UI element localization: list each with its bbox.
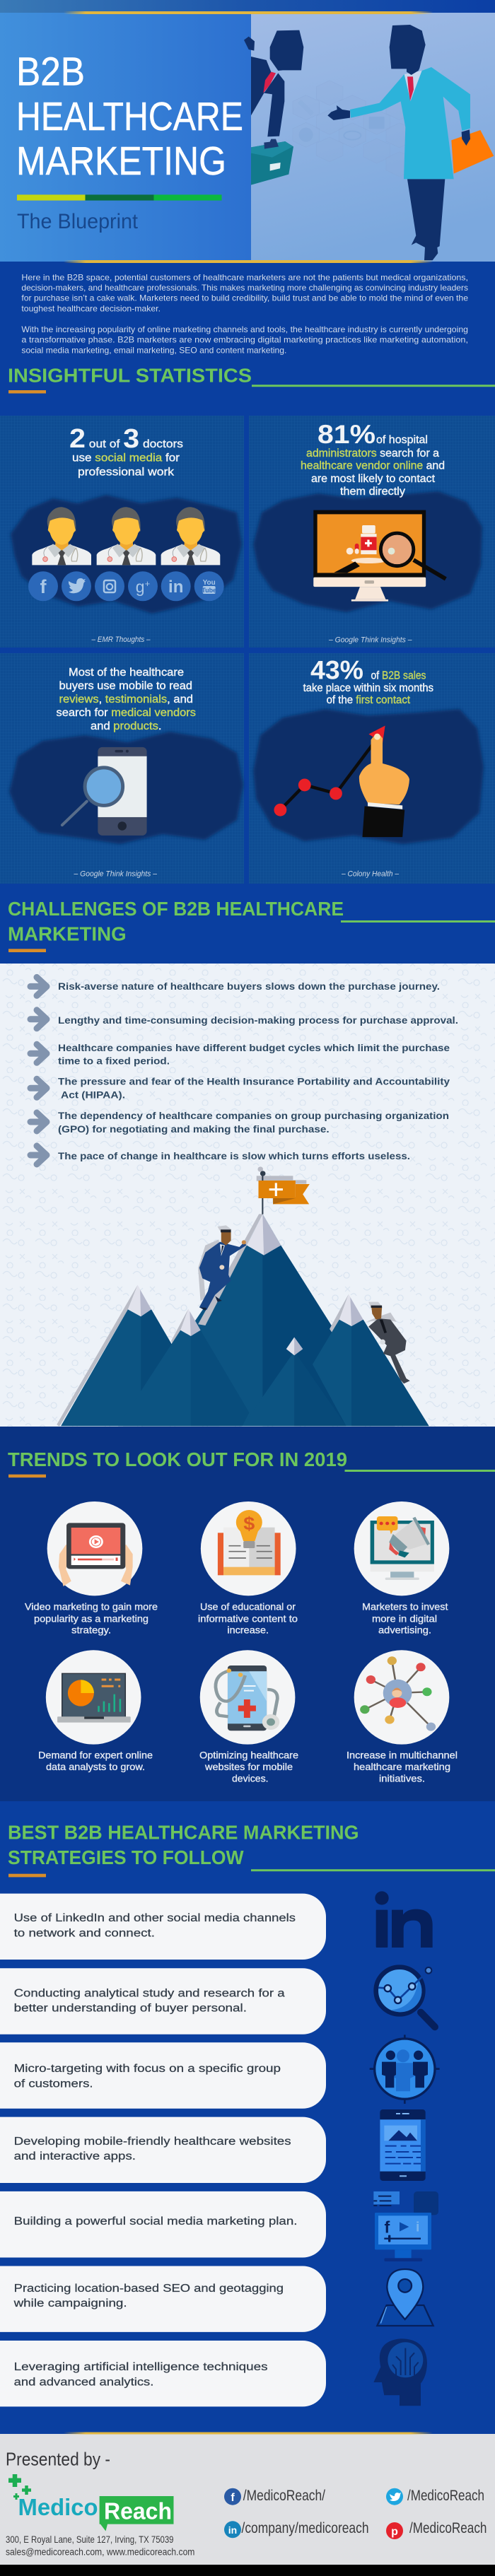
- caption: Demand for expert online: [38, 1749, 153, 1760]
- social: pinterest: p: [391, 2526, 398, 2538]
- strategy card: analytical research: [0, 1968, 326, 2035]
- icon: map pin: [377, 2269, 433, 2326]
- panel: sales timing stat: [249, 653, 495, 884]
- stat text: take place within six months: [303, 682, 433, 694]
- icons: three doctors: [32, 507, 220, 565]
- icon: book with bulb: [201, 1501, 296, 1596]
- caption: [346, 1749, 458, 1784]
- challenge 5: The dependency of healthcare companies on group purchasing organization: [58, 1111, 449, 1121]
- stat text: administrators search for a: [306, 447, 439, 459]
- icons: social media row: +: [145, 578, 150, 589]
- caption: strategy.: [71, 1624, 111, 1636]
- illustration: mountains with flag and climbers: [57, 1166, 429, 1427]
- illustration: businessman with briefcase: [244, 30, 303, 185]
- trend: data analysts: [38, 1650, 153, 1772]
- stat text: reviews, testimonials , and: [59, 693, 193, 706]
- icons: social media row: in: [168, 578, 183, 597]
- flag on the summit: [257, 1166, 310, 1214]
- presented by: Presented by -: [6, 2449, 110, 2470]
- stat text: [303, 655, 433, 706]
- panel: social media doctors stat: [0, 416, 244, 648]
- caption: healthcare marketing: [354, 1761, 450, 1772]
- icon: multichannel network: [354, 1650, 449, 1745]
- stat text: 2 out of 3 doctors: [69, 424, 183, 454]
- source: – Google Think Insights –: [74, 870, 158, 878]
- icon: social media monitor: [373, 2191, 438, 2261]
- climber on main peak: [198, 1225, 246, 1311]
- challenge 3: time to a fixed period.: [58, 1056, 170, 1067]
- contact details: 300, E Royal Lane, Suite 127, Irving, TX 75039: [6, 2534, 174, 2545]
- climber on right peak: [366, 1302, 410, 1383]
- heading: trends: TRENDS TO LOOK OUT FOR IN 2019: [8, 1448, 347, 1470]
- caption: [38, 1749, 153, 1772]
- heading: challenges: [8, 898, 495, 952]
- caption: devices.: [232, 1773, 269, 1784]
- heading: insightful statistics: INSIGHTFUL STATISTICS: [8, 364, 252, 386]
- intro paragraphs: With the increasing popularity of online marketing channels and tools, the healthcare industry is currently undergoing: [21, 324, 468, 334]
- stat text: buyers use mobile to read: [59, 680, 192, 692]
- challenge 5: [30, 1111, 449, 1135]
- strategy card: micro-targeting: Micro-targeting with focus on a specific group: [14, 2063, 281, 2075]
- caption: Optimizing healthcare: [199, 1749, 298, 1760]
- social: facebook: /MedicoReach/: [243, 2488, 325, 2504]
- stat text: of hospital: [376, 434, 428, 446]
- strategy card: location SEO: [0, 2266, 326, 2332]
- strategy card: social plan: Building a powerful social media marketing plan.: [14, 2215, 297, 2227]
- icon: analytics magnifier: [376, 1967, 435, 2027]
- challenge 2: Lengthy and time-consuming decision-making process for purchase approval.: [58, 1015, 458, 1026]
- icon: laptop with pie chart: [46, 1650, 141, 1745]
- icons: social media row: [28, 571, 224, 601]
- challenge 5: (GPO) for negotiating and making the final purchase.: [58, 1124, 330, 1135]
- icon: linkedin: [375, 1891, 433, 1948]
- icons: social media row: f: [40, 576, 47, 597]
- icons: social media row: Tube: [202, 587, 216, 594]
- caption: Video marketing to gain more: [25, 1600, 158, 1612]
- heading: trends: [8, 1448, 495, 1477]
- caption: [25, 1600, 158, 1636]
- strategy card: mobile-friendly: [0, 2117, 326, 2183]
- heading: best strategies: [8, 1821, 495, 1877]
- challenge 3: Healthcare companies have different budget cycles which limit the purchase: [58, 1043, 450, 1053]
- logo: MedicoReach: Medico: [18, 2494, 98, 2520]
- illustration: monitor with medicine and magnifier: [313, 510, 446, 602]
- icon: monitor with megaphone: [354, 1501, 449, 1596]
- stat text: 81%: [318, 420, 375, 449]
- stat text: them directly: [340, 486, 405, 498]
- source: – EMR Thoughts –: [91, 636, 151, 644]
- caption: increase.: [227, 1624, 269, 1636]
- trend: mobile optimization: [199, 1650, 298, 1784]
- trend: multichannel: [346, 1650, 458, 1784]
- challenge 1: Risk-averse nature of healthcare buyers slows down the purchase journey.: [58, 981, 440, 992]
- strategy card: mobile-friendly: Developing mobile-friendly healthcare websites: [14, 2136, 291, 2148]
- heading: challenges: MARKETING: [8, 923, 127, 945]
- caption: popularity as a marketing: [34, 1612, 148, 1624]
- intro paragraphs: a transformative phase. B2B marketers are now embracing digital marketing practices like marketing automation,: [21, 335, 468, 345]
- panel: hospital administrators stat: [249, 416, 495, 648]
- social: linkedin: [224, 2520, 369, 2538]
- challenge 2: [30, 1010, 458, 1029]
- icon: book with bulb: $: [243, 1513, 255, 1534]
- heading: insightful statistics: [8, 364, 495, 393]
- heading: best strategies: BEST B2B HEALTHCARE MARKETING: [8, 1821, 359, 1843]
- stat text: are most likely to contact: [311, 473, 436, 485]
- medical hexagon backdrop: [293, 81, 413, 177]
- strategy card: analytical research: better understanding of buyer personal.: [14, 2003, 247, 2015]
- hero title: MARKETING: [16, 139, 226, 184]
- tricolor divider: [17, 194, 222, 201]
- strategy card: AI: Leveraging artificial intelligence techniques: [14, 2361, 268, 2373]
- stat text: [301, 420, 445, 498]
- icon: social media monitor: i: [416, 2220, 419, 2235]
- stat text: Most of the healthcare: [69, 667, 184, 679]
- challenge 4: The pressure and fear of the Health Insurance Portability and Accountability: [58, 1077, 450, 1087]
- heading: challenges: CHALLENGES OF B2B HEALTHCARE: [8, 898, 344, 920]
- strategy card: LinkedIn: [0, 1894, 326, 1960]
- social: pinterest: [386, 2520, 487, 2539]
- hero title: HEALTHCARE: [16, 94, 243, 139]
- hero banner: [0, 0, 495, 263]
- stat text: of B2B sales: [371, 669, 426, 681]
- icon: mobile page: [380, 2109, 426, 2181]
- strategy card: micro-targeting: [0, 2042, 326, 2109]
- caption: Marketers to invest: [362, 1600, 448, 1612]
- caption: Use of educational or: [200, 1600, 296, 1612]
- hero title: B2B: [16, 49, 85, 95]
- strategy card: mobile-friendly: and interactive apps.: [14, 2150, 136, 2162]
- panel: trends: [0, 1427, 495, 1801]
- social: facebook: f: [231, 2492, 235, 2504]
- intro paragraphs: [21, 272, 468, 355]
- icon: social media monitor: f: [384, 2218, 390, 2236]
- intro paragraphs: for purchase isn’t a cake walk. Marketers need to build credibility, build trust and be able to mold the mind of even the: [21, 293, 468, 303]
- strategy card: location SEO: while campaigning.: [13, 2297, 127, 2309]
- icon: phone with stethoscope: [200, 1650, 295, 1745]
- stat text: use social media for: [72, 452, 180, 464]
- trend: educational content: [198, 1501, 298, 1636]
- caption: data analysts to grow.: [46, 1761, 145, 1772]
- social: linkedin: /company/medicoreach: [242, 2520, 369, 2536]
- caption: [199, 1749, 298, 1784]
- strategy card: location SEO: Practicing location-based SEO and geotagging: [14, 2283, 284, 2295]
- stat text: 43%: [310, 655, 363, 684]
- caption: websites for mobile: [204, 1761, 293, 1772]
- strategy card: LinkedIn: to network and connect.: [14, 1927, 155, 1939]
- stat text: search for medical vendors: [57, 707, 196, 719]
- icons: social media row: You: [203, 579, 216, 587]
- caption: advertising.: [378, 1624, 431, 1636]
- hero subtitle: The Blueprint: [17, 210, 138, 233]
- contact details: [6, 2534, 194, 2558]
- strategy card: LinkedIn: Use of LinkedIn and other social media channels: [14, 1912, 296, 1924]
- stat text: and products .: [91, 720, 161, 732]
- challenge 1: [30, 977, 440, 995]
- caption: more in digital: [372, 1612, 437, 1624]
- source: – Colony Health –: [341, 870, 400, 878]
- stat text: healthcare vendor online and: [301, 460, 445, 472]
- stat text: of the first contact: [327, 694, 411, 706]
- challenge 6: The pace of change in healthcare is slow which turns efforts useless.: [58, 1151, 410, 1161]
- caption: Increase in multichannel: [346, 1749, 458, 1760]
- contact details: sales@medicoreach.com, www.medicoreach.com: [6, 2546, 194, 2558]
- intro paragraphs: toughest healthcare decision-maker.: [21, 303, 161, 313]
- caption: initiatives.: [379, 1773, 425, 1784]
- hero title: [16, 49, 243, 184]
- icon: target audience: [370, 2035, 440, 2104]
- strategy card: social plan: [0, 2191, 326, 2258]
- heading: best strategies: STRATEGIES TO FOLLOW: [8, 1846, 244, 1868]
- source: – Google Think Insights –: [328, 636, 412, 645]
- trend: video marketing: [25, 1501, 158, 1636]
- footer: [0, 2432, 495, 2576]
- caption: [198, 1600, 298, 1636]
- stat text: professional work: [78, 467, 174, 478]
- intro paragraphs: social media marketing, email marketing, SEO and content marketing.: [21, 345, 286, 355]
- strategy card: AI: [0, 2341, 326, 2406]
- social: linkedin: in: [228, 2524, 237, 2536]
- intro paragraphs: Here in the B2B space, potential customers of healthcare marketers are not the patients but medical organizations,: [21, 272, 468, 282]
- caption: informative content to: [198, 1612, 298, 1624]
- strategy card: micro-targeting: of customers.: [14, 2078, 93, 2090]
- caption: [362, 1600, 448, 1636]
- stat text: [69, 424, 183, 478]
- logo: MedicoReach: [8, 2474, 174, 2531]
- intro paragraphs: decision-makers, and healthcare professionals. This makes marketing more challenging as convincing industry leaders: [21, 283, 468, 293]
- illustration: phone with magnifier: [62, 747, 147, 836]
- icon: AI head: [373, 2338, 427, 2406]
- trend: digital advertising: [354, 1501, 449, 1636]
- social: facebook: [224, 2488, 325, 2505]
- challenge 6: [30, 1146, 410, 1164]
- illustration: doctor in lab coat: [327, 25, 494, 260]
- icons: social media row: g: [136, 578, 145, 596]
- challenge 3: [30, 1043, 450, 1067]
- strategy card: analytical research: Conducting analytical study and research for a: [14, 1987, 285, 1999]
- panel: challenges list and mountain illustration: [0, 964, 495, 1427]
- icon: tablet with video: [47, 1501, 142, 1596]
- stat text: [57, 667, 196, 732]
- strategy card: AI: and advanced analytics.: [14, 2377, 153, 2388]
- logo: MedicoReach: Reach: [104, 2498, 172, 2524]
- social: twitter: [386, 2488, 484, 2505]
- challenge 4: Act (HIPAA).: [61, 1090, 125, 1101]
- illustration: rising chart with pointing hand: [274, 725, 409, 837]
- panel: mobile research stat: [0, 653, 244, 884]
- challenge 4: [30, 1077, 450, 1101]
